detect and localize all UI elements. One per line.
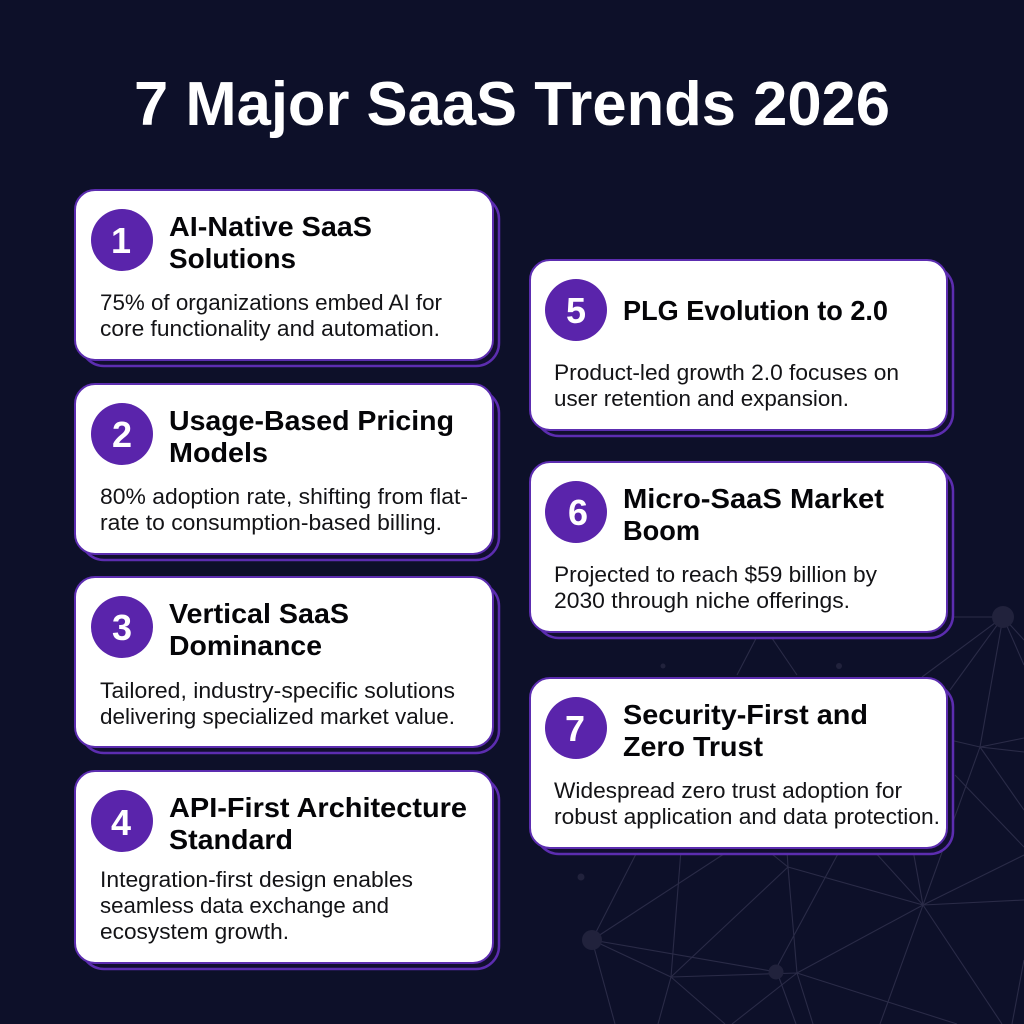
description 3 xyxy=(100,678,455,729)
number badge 2 xyxy=(91,403,153,465)
number badge 6 xyxy=(545,481,607,543)
heading 7: Zero Trust xyxy=(623,731,763,762)
number badge 4 xyxy=(91,790,153,852)
number badge 5: 5 xyxy=(566,290,586,331)
description 4: ecosystem growth. xyxy=(100,919,289,944)
description 6: Projected to reach $59 billion by xyxy=(554,562,877,587)
description 5: Product-led growth 2.0 focuses on xyxy=(554,360,899,385)
heading 3: Vertical SaaS xyxy=(169,598,349,629)
panel: trend 6 xyxy=(530,462,953,638)
number badge 1 xyxy=(91,209,153,271)
heading 2: Models xyxy=(169,437,268,468)
description 1 xyxy=(100,290,442,341)
title: 7 Major SaaS Trends 2026 xyxy=(134,70,890,139)
background network pattern xyxy=(592,617,1024,1024)
description 1: 75% of organizations embed AI for xyxy=(100,290,442,315)
panel: trend 4 xyxy=(75,771,499,969)
description 3: delivering specialized market value. xyxy=(100,704,455,729)
description 6: 2030 through niche offerings. xyxy=(554,588,850,613)
description 4: Integration-first design enables xyxy=(100,867,413,892)
network nodes xyxy=(578,606,1014,980)
description 5 xyxy=(554,360,899,411)
heading 3 xyxy=(169,598,349,661)
heading 6: Micro-SaaS Market xyxy=(623,483,884,514)
heading 6 xyxy=(623,483,884,546)
heading 4: API-First Architecture xyxy=(169,792,467,823)
panel: trend 1 xyxy=(75,190,499,366)
number badge 4: 4 xyxy=(111,802,131,843)
description 2: rate to consumption-based billing. xyxy=(100,510,442,535)
description 7 xyxy=(554,778,940,829)
number badge 1: 1 xyxy=(111,220,131,261)
number badge 5 xyxy=(545,279,607,341)
number badge 6: 6 xyxy=(568,492,588,533)
description 2: 80% adoption rate, shifting from flat- xyxy=(100,484,468,509)
panel: trend 5 xyxy=(530,260,953,436)
description 7: robust application and data protection. xyxy=(554,804,940,829)
number badge 3 xyxy=(91,596,153,658)
description 7: Widespread zero trust adoption for xyxy=(554,778,902,803)
heading 4 xyxy=(169,792,467,855)
heading 6: Boom xyxy=(623,515,700,546)
panel: trend 3 xyxy=(75,577,499,753)
number badge 2: 2 xyxy=(112,414,132,455)
panel: trend 2 xyxy=(75,384,499,560)
heading 2: Usage-Based Pricing xyxy=(169,405,454,436)
description 6 xyxy=(554,562,877,613)
description 3: Tailored, industry-specific solutions xyxy=(100,678,455,703)
number badge 7 xyxy=(545,697,607,759)
heading 1 xyxy=(169,211,372,274)
heading 5: PLG Evolution to 2.0 xyxy=(623,295,888,326)
number badge 7: 7 xyxy=(565,708,585,749)
heading 1: Solutions xyxy=(169,243,296,274)
heading 3: Dominance xyxy=(169,630,322,661)
heading 2 xyxy=(169,405,454,468)
heading 7 xyxy=(623,699,868,762)
number badge 3: 3 xyxy=(112,607,132,648)
description 2 xyxy=(100,484,468,535)
description 4 xyxy=(100,867,413,944)
description 5: user retention and expansion. xyxy=(554,386,849,411)
panel: trend 7 xyxy=(530,678,953,854)
heading 4: Standard xyxy=(169,824,293,855)
description 1: core functionality and automation. xyxy=(100,316,440,341)
heading 1: AI-Native SaaS xyxy=(169,211,372,242)
heading 7: Security-First and xyxy=(623,699,868,730)
description 4: seamless data exchange and xyxy=(100,893,389,918)
